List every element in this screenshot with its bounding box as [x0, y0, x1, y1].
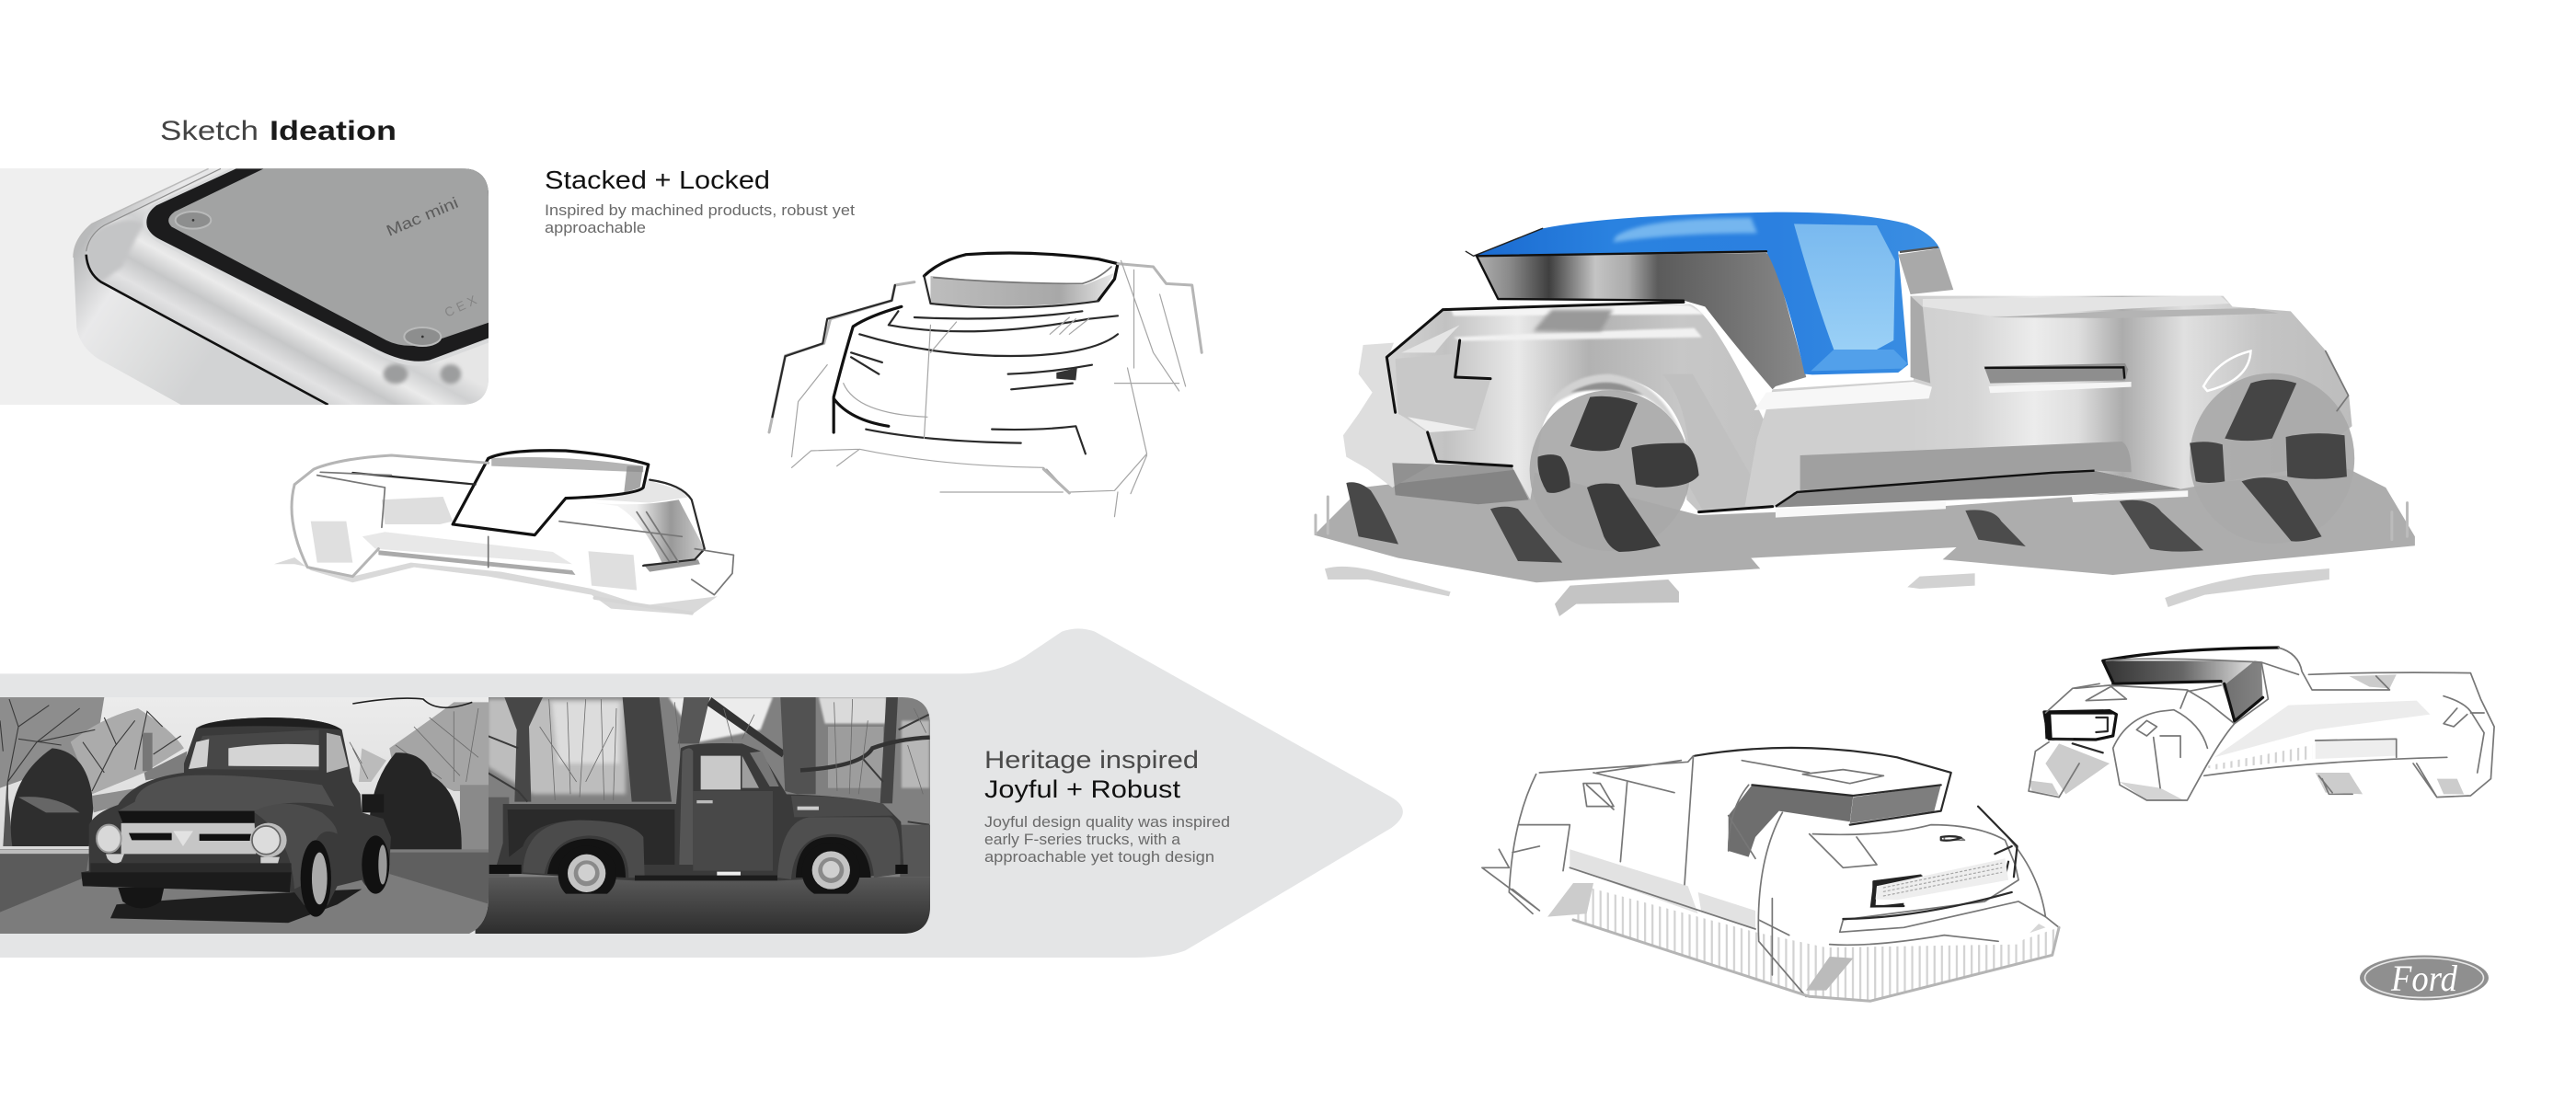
foot: lower right	[404, 327, 441, 346]
logo: Ford oval: Ford	[2390, 958, 2458, 999]
product label: Mac mini: Mac mini	[384, 194, 461, 240]
sketch: three-quarter front truck	[1482, 742, 2059, 1001]
sketch: three-quarter rear truck	[2029, 648, 2494, 800]
wheel: front	[1530, 390, 1699, 552]
ground reflections	[1325, 567, 2329, 616]
text block: Stacked + Locked description: Inspired by machined products, robust yet	[545, 202, 855, 219]
rear wheel	[1965, 351, 2354, 552]
title: Sketch Ideation: Sketch	[160, 116, 259, 146]
sketch: main blue-roof truck rendering	[1314, 212, 2415, 616]
logo: Ford oval	[2360, 955, 2489, 1001]
heading: Joyful + Robust: Joyful + Robust	[984, 775, 1181, 803]
regulatory marks: C E X	[443, 292, 479, 320]
hatching under truck	[1573, 886, 2059, 1001]
ground shadow	[1314, 469, 2415, 582]
photo panel: heritage F-series trucks	[0, 696, 936, 938]
description	[984, 814, 1230, 866]
cab glass	[1477, 253, 1806, 389]
description: Joyful design quality was inspired	[984, 814, 1230, 831]
foot: upper left	[176, 212, 211, 229]
photo: front view truck	[0, 696, 490, 936]
arrow panel background	[0, 628, 1403, 958]
sketch: front view truck line drawing	[769, 253, 1202, 517]
description: early F-series trucks, with a	[984, 832, 1181, 848]
body: front silver shell	[1343, 304, 1785, 512]
text block: Stacked + Locked description: approachable	[545, 220, 646, 236]
photo: side view truck	[476, 696, 936, 938]
subheading: Heritage inspired: Heritage inspired	[984, 746, 1199, 774]
panel: Mac mini product photo	[0, 168, 490, 405]
heading: Stacked + Locked: Stacked + Locked	[545, 166, 770, 194]
blue roof and pillar	[1474, 212, 1953, 374]
sketch: side view truck, faded	[274, 451, 733, 614]
grass strokes	[1316, 497, 2408, 540]
body: rear silver shell	[1745, 296, 2352, 518]
ink lines	[1386, 228, 1773, 512]
text block: Stacked + Locked description	[545, 202, 855, 236]
title: Sketch Ideation: Ideation	[270, 116, 397, 146]
description: approachable yet tough design	[984, 849, 1214, 866]
front tire blocks	[1346, 482, 1562, 563]
text block: Heritage inspired	[984, 746, 1230, 866]
title: Sketch Ideation	[160, 116, 397, 146]
